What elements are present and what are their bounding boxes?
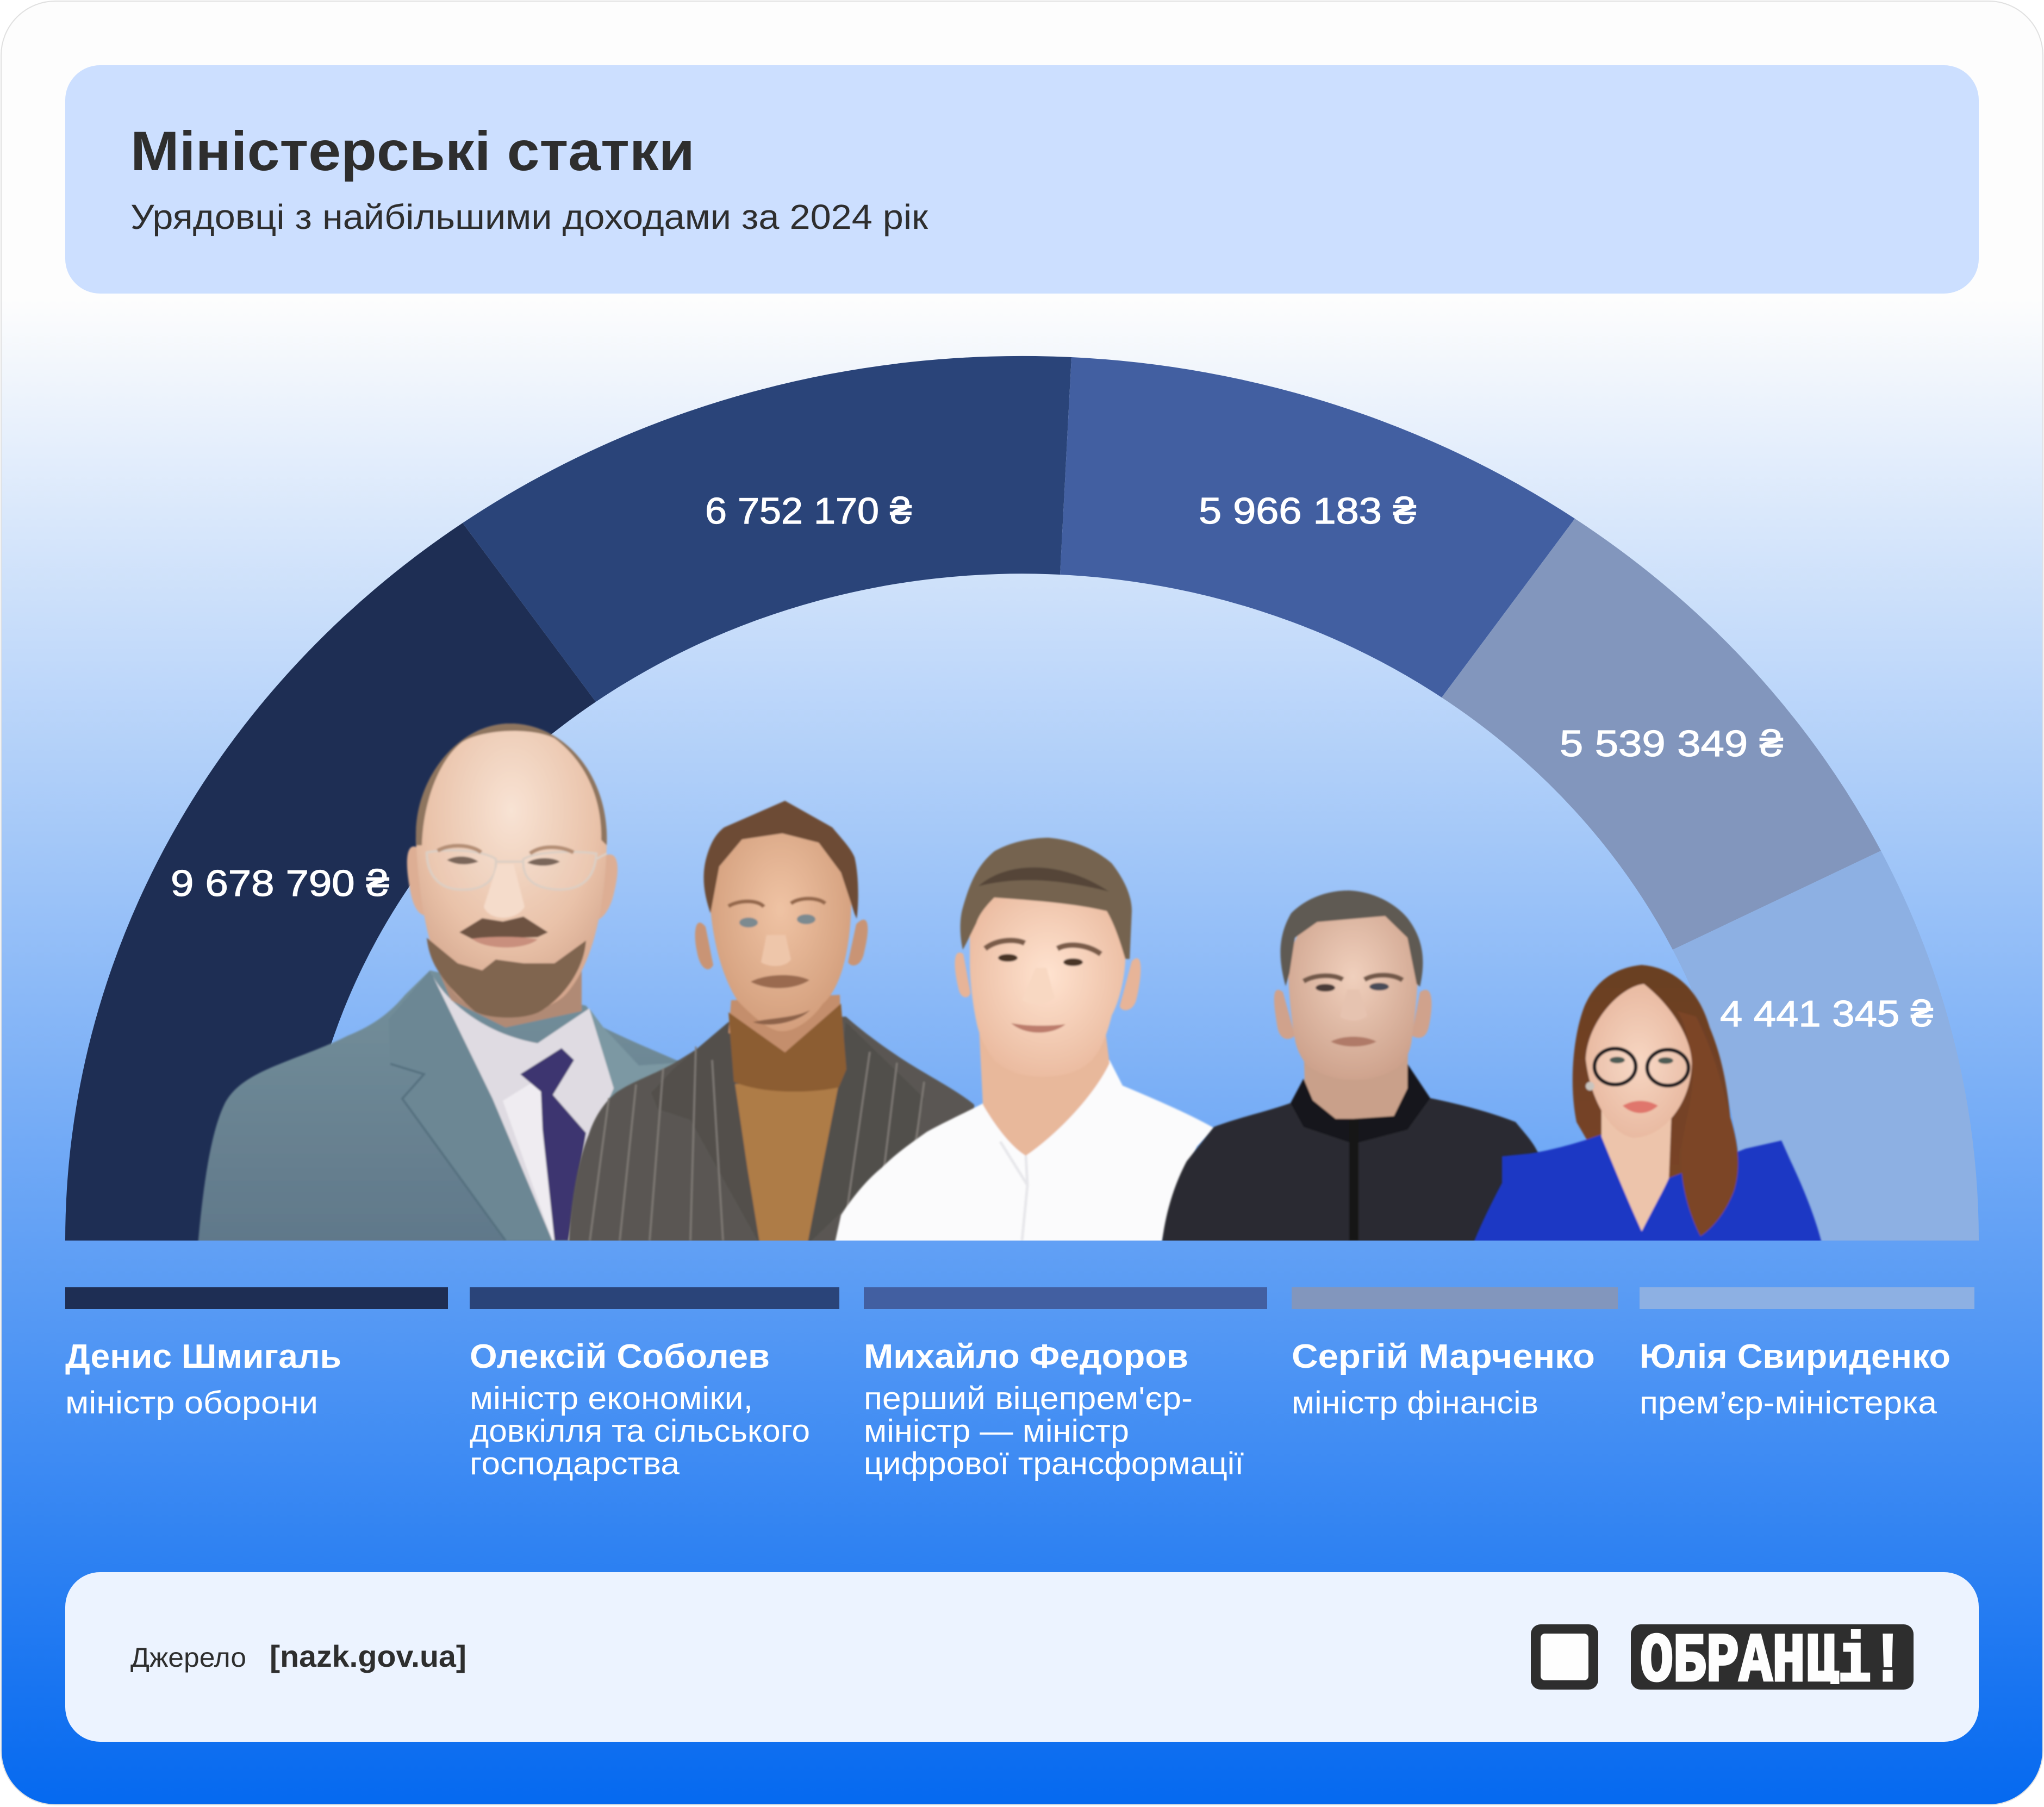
hair	[704, 801, 858, 919]
ears	[1274, 990, 1431, 1039]
photo: Сергій Марченко	[1162, 890, 1549, 1245]
shirt	[430, 970, 614, 1241]
footer panel	[65, 1572, 1979, 1742]
photo: Денис Шмигаль	[198, 724, 682, 1245]
header panel	[65, 65, 1979, 294]
legend column: Олексій Соболев: Олексій Соболев	[470, 1338, 770, 1375]
lips	[1623, 1101, 1658, 1113]
logo icon	[1531, 1624, 1598, 1690]
value: Федоров: 5 966 183 ₴	[1199, 490, 1416, 532]
glasses	[1594, 1049, 1688, 1086]
segment: Федоров	[1060, 357, 1575, 697]
title: Міністерські статки	[130, 120, 695, 182]
beard	[427, 938, 586, 1018]
neck	[1304, 1049, 1408, 1120]
source label: Джерело	[130, 1642, 246, 1673]
legend column: Денис Шмигаль: міністр оборони	[65, 1385, 318, 1420]
sweater	[735, 1084, 839, 1245]
legend column: Михайло Федоров: перший віцепрем'єр-	[864, 1381, 1193, 1416]
legend column: Сергій Марченко: міністр фінансів	[1292, 1385, 1538, 1420]
value labels	[171, 490, 1933, 1035]
legend column: Юлія Свириденко: прем’єр-міністерка	[1640, 1385, 1937, 1420]
neck	[979, 1017, 1110, 1156]
zipper	[1349, 1120, 1358, 1241]
legend column: Олексій Соболев: господарства	[470, 1446, 680, 1481]
brows and eyes	[985, 940, 1101, 954]
legend column: Сергій Марченко: Сергій Марченко	[1292, 1338, 1595, 1375]
ears	[407, 846, 618, 920]
legend column: Олексій Соболев: міністр економіки,	[470, 1381, 753, 1416]
value: Свириденко: 4 441 345 ₴	[1720, 993, 1933, 1035]
hair front drape	[1677, 1011, 1738, 1236]
photo: Олексій Соболев	[569, 801, 979, 1245]
neck and chest	[1601, 1109, 1672, 1231]
segment: Свириденко	[1673, 851, 1979, 1241]
hair back	[1573, 965, 1732, 1218]
glasses	[427, 850, 607, 890]
face	[1586, 984, 1692, 1138]
legend column: Михайло Федоров: Михайло Федоров	[864, 1338, 1188, 1375]
brows and eyes	[1304, 975, 1403, 981]
legend column: Денис Шмигаль	[65, 1287, 448, 1420]
legend column: Олексій Соболев	[470, 1287, 839, 1481]
legend column: Михайло Федоров: міністр — міністр	[864, 1413, 1129, 1449]
value: Соболев: 6 752 170 ₴	[705, 490, 912, 532]
logo wordmark: ОБРАНЦі!	[1640, 1623, 1904, 1701]
hair	[416, 724, 607, 845]
legend column: Денис Шмигаль: Денис Шмигаль	[65, 1338, 341, 1375]
hair	[1280, 890, 1423, 987]
legend column: Олексій Соболев: довкілля та сільського	[470, 1413, 810, 1449]
nose	[484, 864, 525, 918]
ears	[695, 920, 868, 969]
moustache and mouth	[751, 975, 809, 988]
turtleneck	[728, 1004, 846, 1092]
earring	[1586, 1082, 1594, 1091]
neck shadow	[440, 971, 583, 1029]
eyes	[728, 899, 825, 907]
collar	[1291, 1064, 1430, 1144]
segment: Марченко	[1442, 519, 1881, 950]
segment: Соболев	[463, 356, 1071, 702]
value: Шмигаль: 9 678 790 ₴	[171, 863, 389, 904]
legend column: Юлія Свириденко: Юлія Свириденко	[1640, 1338, 1950, 1375]
pinstripes	[590, 1046, 924, 1241]
left lapel	[429, 973, 551, 1241]
semicircle income chart	[65, 356, 1979, 1241]
mouth	[1331, 1037, 1376, 1046]
segment: Шмигаль	[65, 523, 596, 1241]
subtitle: Урядовці з найбільшими доходами за 2024 рік	[130, 197, 928, 236]
value: Марченко: 5 539 349 ₴	[1560, 723, 1783, 764]
legend column: Юлія Свириденко	[1640, 1287, 1974, 1420]
source link: [nazk.gov.ua]	[270, 1639, 466, 1673]
hair	[960, 838, 1132, 959]
legend column: Сергій Марченко	[1292, 1287, 1618, 1420]
head	[1288, 908, 1418, 1080]
neck	[728, 995, 841, 1060]
eyes	[1610, 1057, 1625, 1063]
dress	[1473, 1135, 1822, 1245]
photo: Михайло Федоров	[834, 838, 1215, 1245]
head	[970, 892, 1125, 1076]
head	[416, 724, 607, 1013]
shirt	[834, 1060, 1215, 1245]
tie	[520, 1048, 586, 1241]
eyes	[447, 857, 560, 865]
photo: Юлія Свириденко	[1473, 965, 1822, 1245]
legend column: Михайло Федоров: цифрової трансформації	[864, 1446, 1244, 1481]
mouth	[1011, 1023, 1065, 1033]
ears	[955, 952, 1141, 1010]
head	[709, 810, 851, 1031]
legend column: Михайло Федоров	[864, 1287, 1267, 1481]
